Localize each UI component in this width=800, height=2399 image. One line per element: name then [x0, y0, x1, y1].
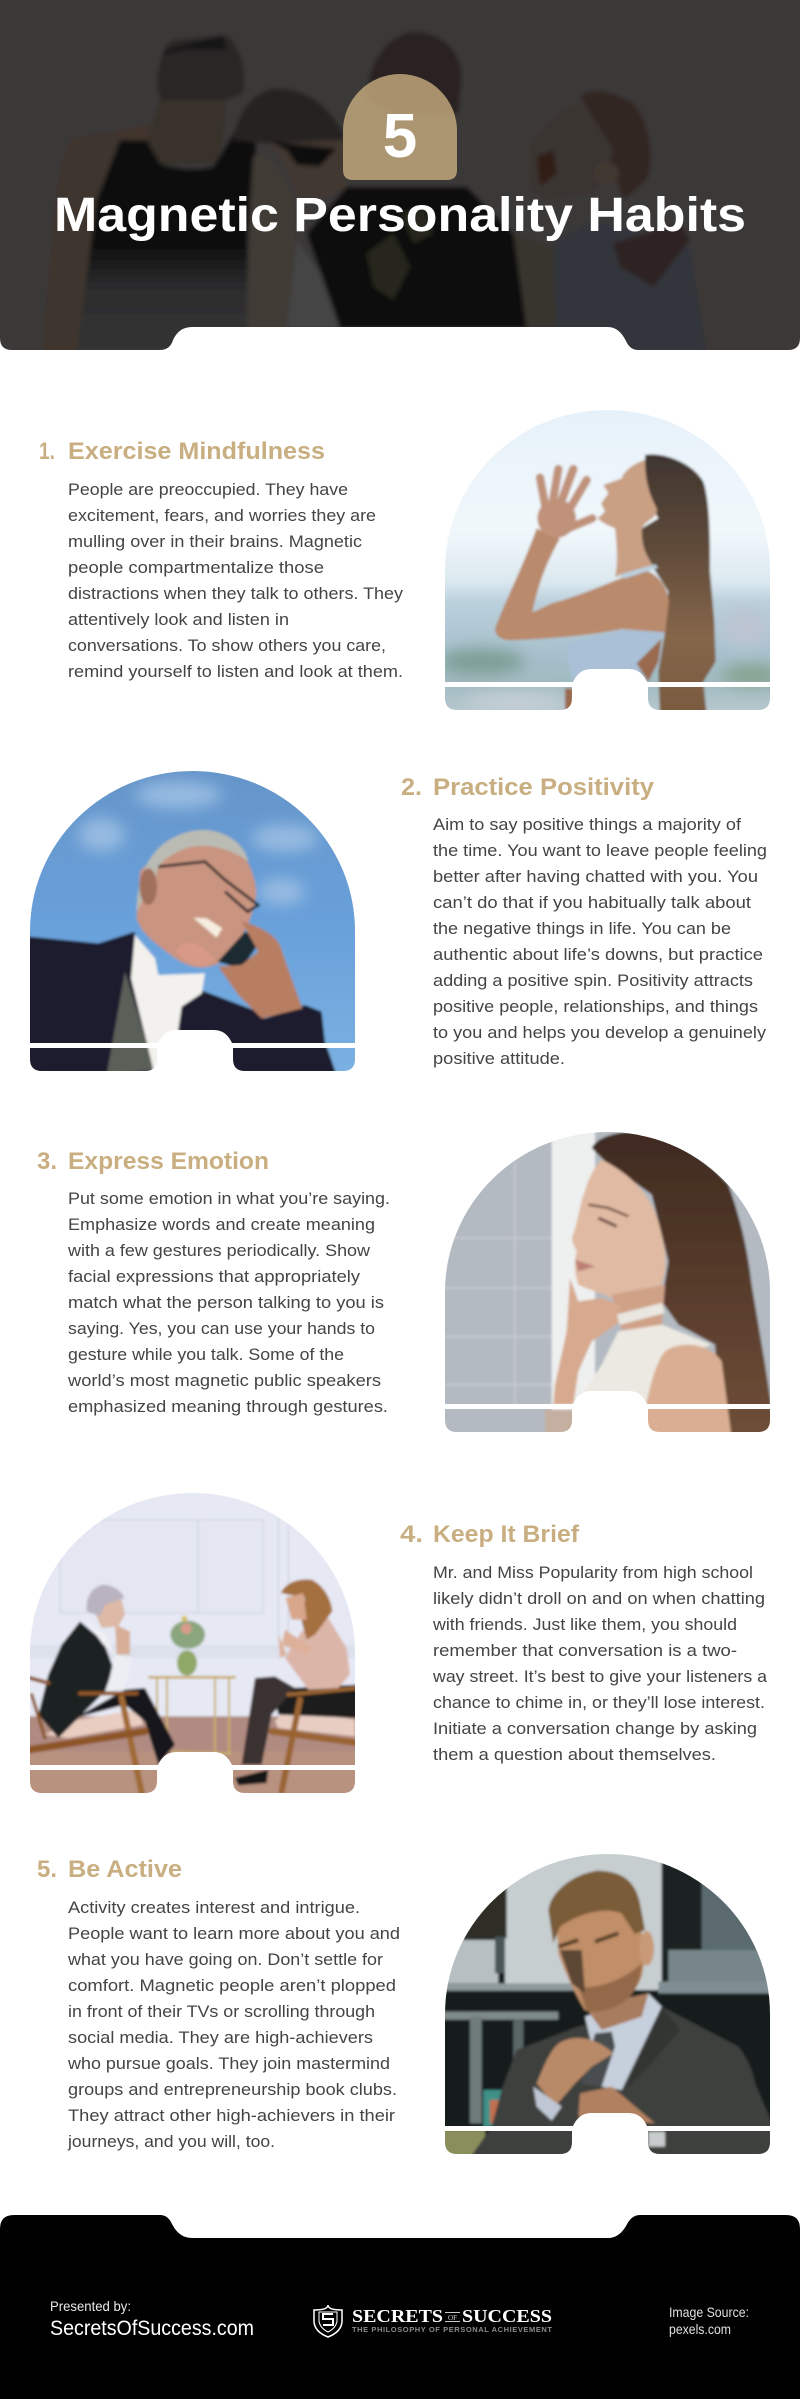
heading 2: Practice Positivity — [433, 774, 655, 801]
body text 3: match what the person talking to you is — [68, 1294, 384, 1312]
body text 2: the negative things in life. You can be — [433, 920, 731, 938]
body text 2: can’t do that if you habitually talk about — [433, 894, 751, 912]
number badge: 5 — [383, 102, 417, 171]
image source: Image Source: — [669, 2304, 749, 2320]
heading 4: 4. — [400, 1521, 423, 1548]
logo: secrets of success: OF — [448, 2314, 457, 2322]
body text 1: remind yourself to listen and look at them. — [68, 663, 403, 681]
panel: footer — [0, 2215, 800, 2399]
heading 3: 3. — [37, 1148, 57, 1175]
heading 1: 1. — [39, 438, 55, 465]
title: Magnetic Personality Habits — [54, 189, 746, 242]
body text 3: world’s most magnetic public speakers — [67, 1372, 381, 1390]
section 4: keep it brief — [25, 1488, 768, 1801]
panel: header — [0, 0, 800, 360]
presented by: Presented by: — [50, 2298, 131, 2314]
body text 2 — [433, 816, 767, 1068]
body text 5: what you have going on. Don’t settle for — [67, 1951, 384, 1969]
heading 2: 2. — [401, 774, 422, 801]
heading 3: Express Emotion — [68, 1148, 269, 1175]
body text 4: Initiate a conversation change by asking — [433, 1720, 757, 1738]
photo: woman meditating above city — [438, 405, 782, 718]
section 3: express emotion — [37, 1128, 778, 1441]
image source — [669, 2304, 749, 2337]
section 1: exercise mindfulness — [39, 405, 782, 718]
number badge — [343, 74, 457, 180]
body text 3: Put some emotion in what you’re saying. — [68, 1190, 390, 1208]
body text 3: gesture while you talk. Some of the — [68, 1346, 344, 1364]
image source: pexels.com — [669, 2321, 731, 2337]
body text 5: comfort. Magnetic people aren’t plopped — [68, 1977, 396, 1995]
body text 5: social media. They are high-achievers — [68, 2029, 373, 2047]
body text 5 — [67, 1899, 400, 2151]
presented by: SecretsOfSuccess.com — [50, 2317, 254, 2340]
body text 2: the time. You want to leave people feeling — [433, 842, 767, 860]
body text 2: Aim to say positive things a majority of — [433, 816, 741, 834]
logo: secrets of success: SECRETS — [352, 2306, 443, 2326]
body text 1: distractions when they talk to others. They — [68, 585, 404, 603]
body text 5: They attract other high-achievers in their — [68, 2107, 396, 2125]
heading 1: Exercise Mindfulness — [68, 438, 325, 465]
body text 1 — [68, 481, 404, 681]
body text 2: authentic about life’s downs, but practice — [433, 946, 763, 964]
body text 1: attentively look and listen in — [68, 611, 289, 629]
photo: woman in profile with long brown hair — [442, 1128, 778, 1441]
body text 4: Mr. and Miss Popularity from high school — [433, 1564, 753, 1582]
body text 1: mulling over in their brains. Magnetic — [68, 533, 362, 551]
body text 2: better after having chatted with you. You — [433, 868, 758, 886]
body text 4: remember that conversation is a two- — [433, 1642, 737, 1660]
body text 5: groups and entrepreneurship book clubs. — [68, 2081, 397, 2099]
body text 3: Emphasize words and create meaning — [68, 1216, 375, 1234]
body text 4: likely didn’t droll on and on when chatting — [433, 1590, 765, 1608]
body text 4 — [432, 1564, 768, 1764]
body text 4: way street. It’s best to give your listeners a — [432, 1668, 768, 1686]
body text 2: adding a positive spin. Positivity attracts — [433, 972, 753, 990]
heading 4: Keep It Brief — [433, 1521, 580, 1548]
body text 3: facial expressions that appropriately — [68, 1268, 361, 1286]
logo: secrets of success: SUCCESS — [462, 2306, 552, 2326]
icon: shield crest — [314, 2305, 342, 2337]
body text 5: who pursue goals. They join mastermind — [67, 2055, 390, 2073]
logo: secrets of success: THE PHILOSOPHY OF PERSONAL ACHIEVEMENT — [352, 2325, 552, 2334]
body text 4: with friends. Just like them, you should — [432, 1616, 737, 1634]
presented by — [50, 2298, 254, 2340]
body text 3: emphasized meaning through gestures. — [68, 1398, 388, 1416]
body text 5: in front of their TVs or scrolling through — [68, 2003, 375, 2021]
body text 2: positive people, relationships, and things — [433, 998, 758, 1016]
body text 3 — [67, 1190, 390, 1416]
logo: secrets of success — [314, 2305, 552, 2337]
photo: two women talking across a table — [25, 1488, 365, 1801]
body text 4: chance to chime in, or they’ll lose interest. — [433, 1694, 765, 1712]
body text 2: to you and helps you develop a genuinely — [433, 1024, 767, 1042]
body text 1: people compartmentalize those — [68, 559, 324, 577]
body text 1: People are preoccupied. They have — [68, 481, 348, 499]
photo: man in grey suit adjusting tie — [442, 1850, 778, 2163]
body text 3: with a few gestures periodically. Show — [67, 1242, 370, 1260]
footer background — [0, 2215, 800, 2399]
body text 5: People want to learn more about you and — [68, 1925, 400, 1943]
heading 5: Be Active — [68, 1856, 182, 1883]
body text 1: conversations. To show others you care, — [68, 637, 386, 655]
body text 2: positive attitude. — [433, 1050, 565, 1068]
body text 1: excitement, fears, and worries they are — [68, 507, 376, 525]
body text 3: saying. Yes, you can use your hands to — [68, 1320, 375, 1338]
body text 4: them a question about themselves. — [433, 1746, 716, 1764]
body text 5: journeys, and you will, too. — [67, 2133, 275, 2151]
photo: laughing man on phone — [25, 765, 365, 1078]
heading 5: 5. — [37, 1856, 57, 1883]
hero photo: four friends laughing under dark overlay — [0, 0, 800, 360]
section 2: practice positivity — [25, 765, 767, 1078]
section 5: be active — [37, 1850, 778, 2163]
body text 5: Activity creates interest and intrigue. — [68, 1899, 360, 1917]
